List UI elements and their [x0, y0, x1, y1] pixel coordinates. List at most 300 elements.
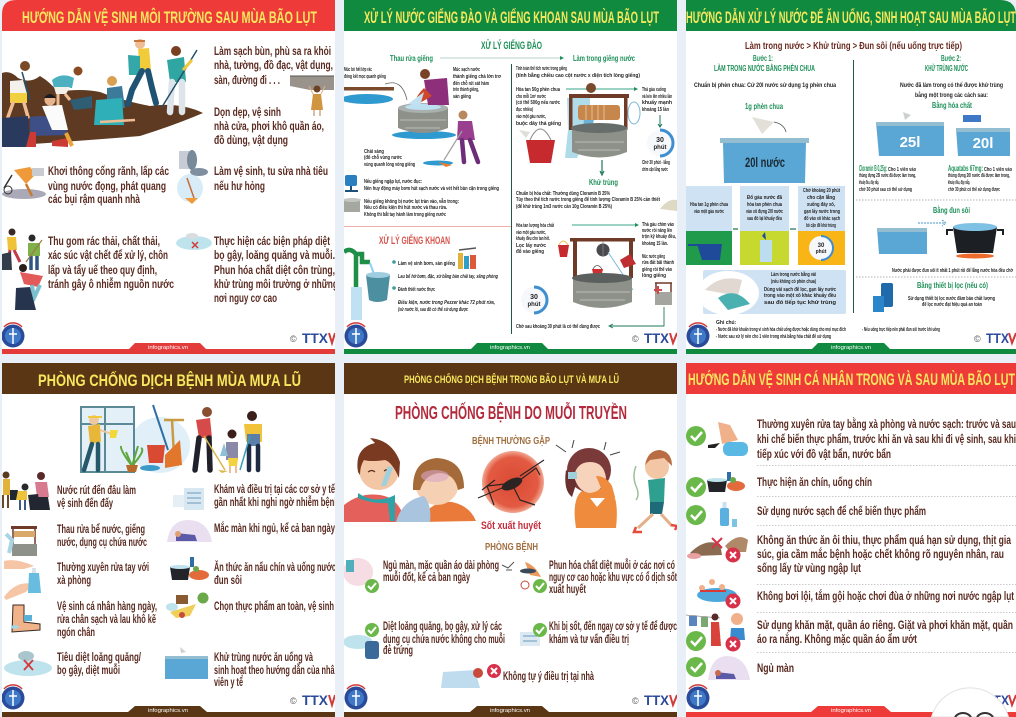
text: right item 4: Chọn thực phẩm an toàn, vệ sinh — [214, 599, 334, 613]
logo: TTXVN — [632, 330, 677, 346]
heading: panel 2: XỬ LÝ NƯỚC GIẾNG ĐÀO VÀ GIẾNG KHOAN SAU MÙA BÃO LỤT — [364, 7, 659, 27]
card: pour into water: sau đó lại khuấy đều — [747, 215, 782, 222]
text: drilled well steps: Làm vệ sinh bơm, sàn giếng — [398, 260, 455, 267]
overlay: round button — [932, 688, 1008, 717]
text: disinfection: Lọc lấy nước — [516, 242, 546, 249]
heading: panel 5 — [344, 363, 677, 394]
text: waste collection: tránh gây ô nhiễm nguồn nước — [48, 276, 174, 291]
text: flooded well: Nên huy động máy bơm hút sạch nước và vét hết bùn cặn trong giếng — [364, 185, 499, 192]
text: disinfection: lòng giếng — [642, 272, 666, 279]
card: dissolve alum: Hòa tan 1g phèn chua — [690, 202, 728, 208]
text: item 4: Vệ sinh cá nhân hàng ngày, — [57, 599, 157, 613]
card: cloth filter: trong vào một xô khác khuấy đều — [764, 292, 836, 299]
text: unflooded well: Nếu giếng không bị nước lụt tràn vào, vẫn trong: — [364, 198, 459, 205]
text: item 1: Nước rút đến đâu làm — [57, 483, 136, 497]
illustration: man at windlass well — [565, 83, 640, 158]
icon: waste collectors — [2, 228, 43, 310]
text: kill larvae and mosquitoes: nơi nguy cơ cao — [214, 291, 277, 305]
text: prevention 4: khám và tư vấn điều trị — [549, 632, 629, 646]
row: cooked food: Thực hiện ăn chín, uống chín — [757, 475, 872, 489]
text: well washing captions: đến chỗ rút sát hàm — [453, 80, 489, 87]
text: disinfection: trộn kỹ khuấy đều, — [642, 233, 676, 240]
footer bar — [344, 343, 677, 354]
text: clarify well intro: khoảng 15 lần — [642, 107, 669, 113]
illustration: washing the well — [341, 69, 478, 167]
icon: toilet — [177, 150, 208, 204]
card: pour into water: hòa tan phèn chua — [747, 202, 782, 208]
text: prevention 3: đẻ trứng — [383, 643, 413, 657]
icon: water pump — [345, 175, 358, 191]
text: well washing captions: Múc bỏ hết lớp rác — [344, 66, 372, 73]
text: notes: - Nước đã khử khuẩn trong vi sinh hóa chất uống được hoặc dùng cho mọi mục đích — [716, 326, 846, 333]
flow: wash to clarify: Thau rửa giếng — [390, 54, 433, 63]
text: disinfection: đổ vào giếng — [516, 248, 544, 255]
row: hand washing: tiếp xúc với đồ vật bẩn, nước bẩn — [757, 447, 891, 461]
icon: cleaning supplies — [458, 248, 476, 269]
text: repair latrine: Làm vệ sinh, tu sửa nhà tiêu — [214, 164, 328, 178]
card: cloth filter: Dùng vải sạch để lọc, gạn lấy nước — [764, 286, 836, 293]
text: well washing captions: Múc sạch nước — [453, 67, 480, 73]
logo: health ministry — [2, 685, 24, 710]
text: clarify well intro: vào một gàu nước, — [516, 114, 546, 120]
illustration: hand pump and bucket — [344, 250, 390, 320]
text: clean mud and tidy — [214, 44, 333, 147]
step titles: LÀM TRONG NƯỚC BẰNG PHÈN CHUA — [714, 64, 815, 73]
illustration: mosquito on red circle — [478, 451, 544, 513]
icon: hospital with check — [520, 623, 547, 646]
text: item 2 — [57, 522, 147, 549]
footer bar: infographics.vn — [831, 708, 871, 714]
logo: TTXVN: TTX — [644, 692, 670, 708]
text: dengue: Sốt xuất huyết — [481, 520, 541, 532]
footer bar: infographics.vn — [831, 345, 871, 351]
card: dissolve alum: vào một gàu nước — [694, 209, 724, 215]
card: settle 30 min: bỏ cặn để khử trùng — [806, 222, 836, 229]
text: clean mud and tidy: Dọn dẹp, vệ sinh — [214, 105, 281, 119]
logo: TTXVN — [290, 332, 335, 346]
text: filter: Bằng thiết bị lọc (nếu có) — [917, 281, 988, 290]
icon: well ring — [343, 198, 361, 212]
card: settle 30 min — [798, 186, 845, 265]
icon: well — [6, 526, 37, 556]
text: chemicals: Cloramin B 0,25g: — [859, 164, 887, 173]
text: waste collection: Thu gom rác thải, chất thải, — [48, 234, 160, 248]
footer bar — [686, 706, 1016, 717]
flow: wash to clarify — [390, 54, 635, 62]
icon: water basin with tablet — [165, 647, 208, 679]
text: filter — [908, 281, 995, 308]
text: item 5: bọ gậy, diệt muỗi — [57, 662, 120, 677]
text: disinfection: Múc nước giếng — [642, 253, 665, 260]
text: item 4: rửa chân sạch và lau khô kẽ — [57, 612, 156, 626]
logo: TTXVN: TTX — [986, 330, 1010, 346]
footer bar: infographics.vn — [490, 345, 530, 351]
logo: TTXVN: TTX — [302, 330, 329, 346]
arrow — [790, 228, 796, 230]
icon: small well — [654, 283, 672, 305]
panel: personal hygiene — [686, 363, 1016, 717]
illustration: people cleaning mud — [2, 39, 203, 147]
illustration: boy feeling sick — [634, 450, 677, 532]
arrow — [733, 228, 738, 230]
logo: TTXVN: © — [632, 696, 639, 706]
text: chemicals: khuấy đều, đậy nắp, — [948, 179, 970, 186]
icon: timer 30 minutes second — [521, 287, 547, 313]
text: kill larvae and mosquitoes: Thực hiện các biện pháp diệt — [214, 234, 330, 248]
text: right item 3: đun sôi — [214, 573, 242, 587]
row: clean water — [686, 502, 926, 527]
text: chemicals: khuấy đều, đậy nắp, — [859, 179, 879, 186]
heading: panel 1 — [2, 0, 335, 31]
subheading: dug well: XỬ LÝ GIẾNG ĐÀO — [481, 39, 542, 52]
logo: TTXVN: © — [632, 334, 639, 344]
text: prevention 4 — [549, 619, 677, 646]
logo: health ministry — [2, 323, 24, 348]
text: item 2: Thau rửa bể nước, giếng — [57, 522, 145, 536]
text: clarify well intro — [516, 65, 672, 173]
card: pour into water: vào xô đựng 20l nước — [746, 209, 783, 215]
row: no spoiled food — [687, 533, 1011, 575]
panel: mosquito-borne disease prevention — [343, 363, 677, 717]
step titles: Bước 1: — [753, 54, 773, 63]
text: right item 1 — [214, 482, 339, 509]
text: item 3: xà phòng — [57, 573, 91, 587]
text: clarify well intro: đục nhiều) — [516, 107, 533, 113]
text: prevention 2: Phun hóa chất diệt muỗi ở các nơi có — [549, 557, 675, 572]
text: disinfection: rửa đất bãi thành — [642, 259, 674, 266]
text: clarify well intro: Tính toán thể tích nước trong giếng — [516, 65, 567, 72]
text: kill larvae and mosquitoes: khử trùng môi trường ở những — [214, 277, 338, 291]
heading: panel 4: PHÒNG CHỐNG DỊCH BỆNH MÙA MƯA LŨ — [38, 370, 301, 390]
text: item 1: vệ sinh đến đấy — [57, 496, 113, 510]
text: no self-treatment: Không tự ý điều trị tại nhà — [503, 669, 594, 683]
text: chemicals: Aquatabs 67mg: — [948, 164, 983, 173]
text: clarify well intro: (có thể 500g nếu nước — [516, 99, 560, 106]
text: repair latrine: nếu hư hỏng — [214, 179, 265, 193]
card: settle 30 min: cho cặn lắng — [807, 194, 835, 201]
logo: health ministry — [686, 685, 710, 710]
illustration: boiling pot — [877, 220, 1003, 258]
icon: foot — [11, 605, 40, 632]
text: right item 1: Khám và điều trị tại các cơ sở y tế — [214, 482, 335, 496]
icon: spray with check — [520, 562, 547, 593]
text: chemicals: thùng đựng 25l nước đã được làm trong, — [859, 173, 916, 179]
heading: panel 3 — [686, 0, 1016, 31]
icon: mosquito small — [502, 562, 514, 570]
icon: water and check — [343, 623, 379, 659]
text: item 5 — [57, 650, 141, 677]
card: cloth filter: Làm trong nước bằng vải — [771, 271, 816, 278]
text: waste collection: xác súc vật chết để xử lý, chôn — [48, 248, 168, 262]
text: clear drains — [48, 164, 169, 206]
text: right item 5: Khử trùng nước ăn uống và — [214, 650, 313, 664]
label: boiling: Bằng đun sôi — [933, 206, 970, 215]
text: right item 2: Mắc màn khi ngủ, kể cả ban ngày — [214, 520, 335, 535]
basin: 25 litres — [876, 112, 944, 156]
text: prevention 3: Diệt loăng quăng, bọ gậy, xử lý các — [383, 619, 502, 633]
icon: sleeping net with check — [343, 558, 379, 593]
logo: TTXVN — [290, 692, 335, 708]
text: chemicals: chờ 30 phút sau có thể sử dụng — [859, 186, 912, 193]
icon: larvae water — [4, 651, 52, 676]
footer bar — [344, 706, 677, 717]
text: drilled well steps: (sử nước lô, sau đó có thể sử dụng được — [398, 306, 468, 313]
card: settle 30 min: gạn lấy nước trong — [804, 208, 840, 215]
footer bar: infographics.vn — [148, 708, 188, 714]
text: drilled well steps: Điều kiện, nước trong Pezzer khác 72 phút rửa, — [398, 300, 495, 306]
text: prevention 1: muỗi đốt, kể cả ban ngày — [383, 569, 470, 584]
label: common diseases: BỆNH THƯỜNG GẶP — [472, 434, 550, 447]
illustration: man with thermometer — [344, 438, 405, 522]
text: item 4 — [57, 599, 157, 639]
text: alum preparation: Chuẩn bị phèn chua: Cứ 20l nước sử dụng 1g phèn chua — [694, 81, 836, 89]
row: personal towels: áo ra nắng. Không mặc quần áo ẩm ướt — [757, 631, 917, 646]
logo: TTXVN: © — [290, 696, 297, 706]
text: right item 5: sinh hoạt theo hướng dẫn của nhân — [214, 662, 339, 677]
panel: environmental sanitation after floods — [2, 0, 338, 354]
text: final wait — [516, 307, 664, 330]
step titles: KHỬ TRÙNG NƯỚC — [925, 64, 968, 73]
logo: health ministry — [344, 323, 368, 348]
text: well washing captions: (đổ chỗ vùng nước — [364, 154, 402, 161]
card: cloth filter — [697, 270, 846, 315]
illustration: girl coughing — [396, 458, 476, 522]
icon: girl hanging laundry — [290, 76, 334, 116]
text: right item 1: gần nhất khi nghi ngờ nhiễm bệnh — [214, 494, 339, 509]
icon: hand wash — [4, 560, 41, 600]
text: right item 5: viên y tế — [214, 675, 243, 689]
text: prevention 4: Khi bị sốt, đến ngay cơ sở y tế để được — [549, 619, 677, 633]
text: clarify well intro: buộc dây thả giếng — [516, 120, 561, 127]
text: clear drains: vùng nước đọng, phát quang — [48, 179, 166, 193]
footer bar: infographics.vn — [148, 345, 188, 351]
footer bar — [2, 706, 335, 717]
row: personal towels — [686, 613, 1013, 652]
text: disinfection: giếng rồi thể vào — [642, 266, 672, 273]
icon: hospital — [173, 488, 204, 510]
title: mosquito-borne diseases: PHÒNG CHỐNG BỆNH DO MUỖI TRUYỀN — [395, 402, 627, 423]
icon: larvae puddle — [176, 233, 212, 250]
illustration: family cleaning — [81, 405, 262, 473]
card: dissolve alum — [684, 186, 732, 265]
icon: drain worker — [2, 167, 46, 199]
icon: food — [166, 592, 208, 618]
card: cloth filter: sau đó tiếp tục khử trùng — [764, 299, 836, 306]
basin: 20 litres: 20l nước — [745, 154, 785, 170]
basin: 25 litres: 25l — [900, 134, 920, 151]
panel: disease prevention in the flood season — [2, 363, 339, 717]
text: prevention 2: nguy cơ cao hoặc khu vực có ổ dịch sốt — [549, 570, 677, 584]
text: clean mud and tidy: sàn, đường đi . . . — [214, 73, 280, 87]
text: waste collection — [48, 234, 174, 291]
text: prevention 3: dụng cụ chứa nước không cho muỗi — [383, 631, 505, 646]
text: kill larvae and mosquitoes — [214, 234, 338, 305]
text: right item 3 — [214, 559, 336, 587]
divider — [852, 60, 854, 313]
icon: mosquito net — [167, 520, 212, 542]
text: disinfection: vào một gàu nước, — [516, 230, 546, 236]
icon: family with trash bags — [2, 472, 50, 510]
icon: powder pile — [660, 200, 677, 211]
dividers — [344, 64, 512, 334]
text: drilled well steps: Đánh thiết nước thực — [398, 286, 435, 293]
text: disinfection: Khử trùng — [589, 178, 618, 187]
text: clean mud and tidy: Làm sạch bùn, phù sa ra khỏi — [214, 44, 331, 58]
logo: TTXVN: TTX — [644, 330, 670, 346]
icon: timer 30 minutes second: 30 — [530, 294, 538, 301]
logo: TTXVN — [632, 692, 677, 708]
heading: panel 6 — [686, 363, 1016, 394]
text: clarify well intro: chìm cặn lắng nước — [642, 166, 668, 173]
text: disinfection intro — [900, 81, 1003, 110]
text: clarify well intro: Thả gàu xuống — [642, 86, 666, 93]
flow: wash to clarify: Làm trong giếng nước — [573, 54, 635, 63]
icon: red bucket — [519, 129, 555, 163]
text: item 3 — [57, 560, 149, 587]
text: kill larvae and mosquitoes: bọ gậy, loăng quăng và muỗi. — [214, 247, 335, 262]
text: clarify well intro: Hòa tan 50g phèn chua — [516, 87, 560, 93]
icon: alum pouring — [752, 117, 786, 134]
text: disinfection intro: Bằng hóa chất — [932, 101, 972, 110]
card: settle 30 min: 30 — [818, 243, 825, 249]
basin: 20 litres tablets — [956, 115, 1010, 156]
text: clear drains: Khơi thông cống rãnh, lấp các — [48, 164, 169, 178]
card: settle 30 min: đổ vào xô khác sạch — [804, 215, 840, 222]
text: clean mud and tidy: nhà cửa, phơi khô quần áo, — [214, 119, 324, 133]
basin: 20 litres — [720, 138, 809, 183]
icon: bed with cross — [441, 664, 501, 688]
step titles: Bước 2: — [941, 54, 961, 63]
row: hand washing — [686, 416, 1016, 461]
text: disinfection: Hòa tan lượng hóa chất — [516, 222, 554, 229]
card: settle 30 min: Chờ khoảng 20 phút — [803, 188, 840, 194]
subheading: drilled well: XỬ LÝ GIẾNG KHOAN — [379, 234, 450, 247]
icon: timer 30 minutes: phút — [654, 145, 666, 151]
separator — [856, 276, 1016, 278]
icon: timer 30 minutes: 30 — [656, 137, 664, 144]
text: well washing captions: đóng kết mọc quanh giếng — [344, 73, 386, 80]
illustration: pulley well — [558, 223, 639, 308]
card: cloth filter: (nếu không có phèn chua) — [771, 278, 816, 285]
text: well washing captions: Chải sàng — [364, 149, 384, 155]
text: unflooded well: Không thì bắt tay hành làm trong giếng nước — [364, 211, 446, 218]
text: disinfection intro: bằng một trong các cách sau: — [915, 90, 988, 99]
heading: panel 5: PHÒNG CHỐNG DỊCH BỆNH TRONG BÃO LỤT VÀ MƯA LŨ — [404, 372, 619, 386]
icon: water filter — [873, 283, 893, 312]
text: drilled well steps — [392, 260, 498, 313]
text: disinfection: khuấy đều cho tan hết. — [516, 235, 550, 242]
text: notes: - Nước sau xử lý nên cho 1 viên trong nhà bằng hóa chất để sử dụng — [716, 333, 831, 340]
heading: panel 2 — [344, 0, 677, 31]
heading: panel 1: HƯỚNG DẪN VỆ SINH MÔI TRƯỜNG SAU MÙA BÃO LỤT — [22, 7, 317, 27]
icon: cooking pot and food — [170, 557, 209, 580]
text: disinfection: (để khử trùng 1m3 nước cần 10g Cloramin B 25%) — [516, 203, 612, 210]
text: clarify well intro: cho mỗi 1m³ nước — [516, 93, 546, 100]
text: kill larvae and mosquitoes: Phun hóa chất diệt côn trùng, — [214, 263, 335, 277]
logo: TTXVN — [974, 330, 1016, 346]
text: clean mud and tidy: đồ dùng, vật dụng — [214, 133, 288, 147]
row: sleep under net — [686, 656, 794, 680]
card: pour into water — [740, 186, 789, 265]
text: drilled well steps: Lau bể hở bơm, đặc, xử bằng bàn chải tay, xăng phòng — [398, 273, 498, 280]
text: notes — [716, 320, 940, 340]
text: well washing captions — [344, 66, 501, 168]
text: well washing captions: thành giếng chà lớn trơ — [453, 73, 501, 80]
text: disinfection: Chuẩn bị hóa chất: Thường dùng Cloramin B 25% — [516, 190, 610, 197]
text: clear drains: các bụi rậm quanh nhà — [48, 192, 140, 206]
icon: timer 30 minutes — [647, 115, 673, 156]
footer bar: infographics.vn — [490, 708, 530, 714]
text: unflooded well — [364, 198, 459, 218]
arrow: to disinfect — [600, 160, 604, 175]
panel: well water treatment — [341, 0, 677, 354]
icon: timer 30 minutes second: phút — [528, 302, 540, 308]
logo: TTXVN: © — [290, 334, 297, 344]
text: clarify well intro: (tính bằng chiều cao cột nước x diện tích lòng giếng) — [516, 72, 640, 79]
text: item 5: Tiêu diệt loăng quăng/ — [57, 650, 141, 664]
text: item 4: ngón chân — [57, 625, 95, 639]
text: prevention 1: Ngủ màn, mặc quần áo dài phòng — [383, 558, 499, 572]
row separators — [757, 466, 1016, 652]
text: clean mud and tidy: nhà, tường, đồ đạc, vật dụng, — [214, 58, 333, 72]
text: item 3: Thường xuyên rửa tay với — [57, 560, 149, 574]
step titles — [714, 54, 968, 73]
text: prevention 1 — [383, 558, 499, 584]
panel: household water treatment — [684, 0, 1016, 354]
row: clean water: Sử dụng nước sạch để chế biến thực phẩm — [757, 504, 926, 518]
label: prevention: PHÒNG BỆNH — [485, 540, 538, 553]
text: well washing captions: trên thành giếng, — [453, 86, 479, 93]
row: no spoiled food: sống lấy từ vùng ngập lụt — [757, 561, 861, 575]
illustration: girl with headache — [556, 440, 620, 528]
text: clarify well intro: khuấy mạnh — [642, 99, 672, 106]
text: repair latrine — [214, 164, 328, 193]
text: well washing captions: vùng quanh lòng vòng giếng — [364, 161, 415, 168]
text: flooded well: Nếu giếng ngập lụt, nước đục: — [364, 178, 422, 185]
text: final wait: Chờ sau khoảng 30 phút là có thể dùng được — [516, 323, 600, 330]
logo: health ministry — [686, 323, 710, 348]
logo: TTXVN: © — [974, 334, 981, 344]
footer bar — [2, 343, 335, 354]
logo: TTXVN: TTX — [986, 692, 1010, 708]
text: filter: để lọc nước đạt hiệu quả an toàn — [922, 301, 982, 308]
logo: health ministry — [344, 685, 368, 710]
card: pour into water: Đổ gàu nước đã — [747, 194, 782, 201]
text: well washing captions: sàn giếng — [453, 93, 471, 100]
card: settle 30 min: xuống đáy xô, — [807, 201, 836, 208]
card: settle 30 min: phút — [816, 249, 827, 255]
footer bar — [686, 343, 1016, 354]
text: prevention 2 — [549, 557, 677, 596]
logo: TTXVN: TTX — [302, 692, 329, 708]
text: disinfection: Tùy theo thể tích nước trong giếng để tính lượng Cloramin B 25% cần thiết — [516, 196, 660, 203]
row: sleep under net: Ngủ màn — [757, 661, 794, 675]
text: prevention 3 — [383, 619, 505, 657]
text: disinfection: nước rồi nâng lên — [642, 228, 672, 234]
text: item 1 — [57, 483, 136, 510]
basin: 20 litres tablets: 20l — [973, 135, 993, 152]
text: clarify well intro: Chờ 30 phút - lắng — [642, 159, 670, 166]
text: waste collection: lấp và tẩy uế theo quy định, — [48, 263, 157, 277]
separator — [856, 199, 1016, 201]
text: disinfection: khoảng 15 lần. — [642, 241, 668, 247]
text: notes: - Nếu uống trực tiếp nên phải đun sôi trước khi uống — [862, 326, 940, 333]
text: chemicals — [859, 164, 1012, 193]
text: disinfection — [516, 178, 676, 279]
text: disinfection: Thả gàu chìm vào — [642, 222, 674, 228]
text: right item 5 — [214, 650, 339, 689]
heading: panel 4 — [2, 363, 335, 394]
